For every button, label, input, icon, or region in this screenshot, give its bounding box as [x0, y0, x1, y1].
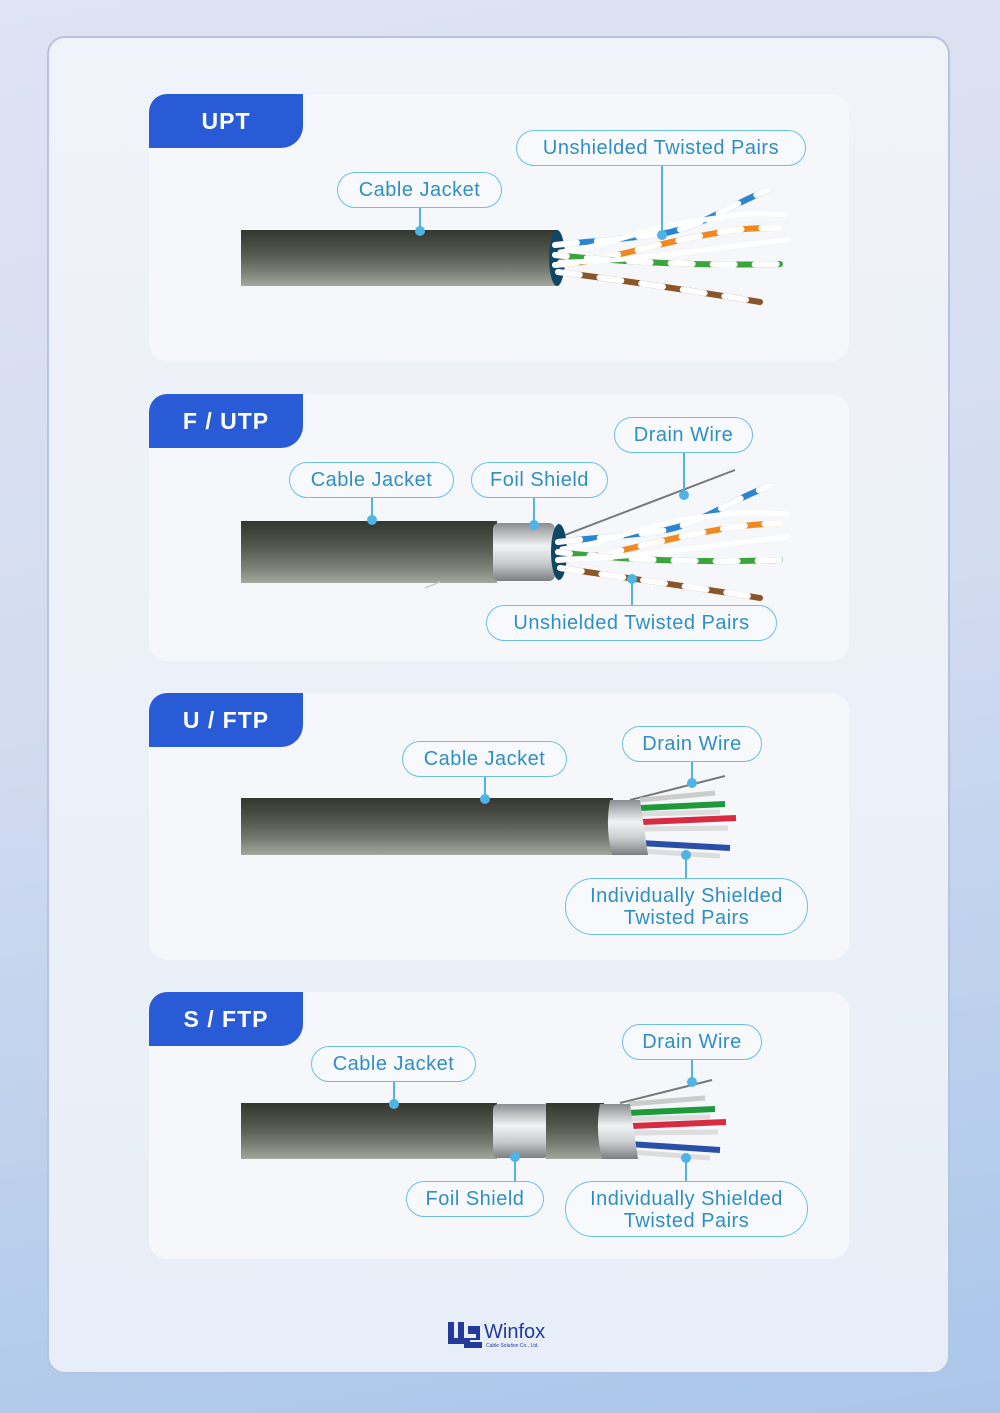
label: Individually Shielded Twisted Pairs: Twisted Pairs	[624, 907, 749, 929]
tab: U/FTP	[149, 693, 303, 747]
tab: UPT: UPT	[202, 108, 250, 134]
label: Individually Shielded Twisted Pairs	[565, 1181, 808, 1237]
tab: S/FTP	[149, 992, 303, 1046]
label: Cable Jacket	[311, 1046, 476, 1082]
label: Foil Shield	[406, 1181, 544, 1217]
label: Foil Shield: Foil Shield	[490, 469, 589, 491]
label: Cable Jacket: Cable Jacket	[424, 748, 545, 770]
label: Individually Shielded Twisted Pairs: Twisted Pairs	[624, 1210, 749, 1232]
icon: WS mark	[448, 1322, 482, 1348]
label: Cable Jacket: Cable Jacket	[359, 179, 480, 201]
panel: F/UTP	[149, 394, 849, 661]
label: Drain Wire	[622, 1024, 762, 1060]
tab: UPT	[149, 94, 303, 148]
tab: S/FTP: S / FTP	[184, 1006, 268, 1032]
label: Individually Shielded Twisted Pairs	[565, 878, 808, 935]
cable illustration: S/FTP	[241, 1060, 726, 1181]
label: Cable Jacket: Cable Jacket	[333, 1053, 454, 1075]
cable illustration: F/UTP	[241, 453, 790, 605]
label: Individually Shielded Twisted Pairs: Individually Shielded	[590, 885, 783, 907]
label: Foil Shield	[471, 462, 608, 498]
logo: Winfox	[448, 1321, 545, 1349]
label: Drain Wire	[614, 417, 753, 453]
label: Drain Wire	[622, 726, 762, 762]
label: Cable Jacket	[337, 172, 502, 208]
label: Drain Wire: Drain Wire	[642, 733, 742, 755]
label: Cable Jacket: Cable Jacket	[311, 469, 432, 491]
cable illustration: UTP	[241, 166, 790, 305]
cable illustration: U/FTP	[241, 762, 736, 878]
label: Drain Wire: Drain Wire	[642, 1031, 742, 1053]
tab: F/UTP: F / UTP	[183, 408, 269, 434]
label: Unshielded Twisted Pairs: Unshielded Twisted Pairs	[513, 612, 750, 634]
logo: Winfox: Cable Solution Co., Ltd.	[486, 1343, 539, 1349]
tab: F/UTP	[149, 394, 303, 448]
label: Cable Jacket	[402, 741, 567, 777]
logo: Winfox: Winfox	[484, 1321, 545, 1343]
panel: U/FTP	[149, 693, 849, 960]
label: Foil Shield: Foil Shield	[426, 1188, 524, 1210]
panel: S/FTP	[149, 992, 849, 1259]
label: Individually Shielded Twisted Pairs: Individually Shielded	[590, 1188, 783, 1210]
tab: U/FTP: U / FTP	[183, 707, 269, 733]
label: Unshielded Twisted Pairs	[486, 605, 777, 641]
label: Unshielded Twisted Pairs	[516, 130, 806, 166]
label: Unshielded Twisted Pairs: Unshielded Twisted Pairs	[543, 137, 779, 159]
label: Drain Wire: Drain Wire	[634, 424, 733, 446]
label: Cable Jacket	[289, 462, 454, 498]
panel: UPT	[149, 94, 849, 361]
